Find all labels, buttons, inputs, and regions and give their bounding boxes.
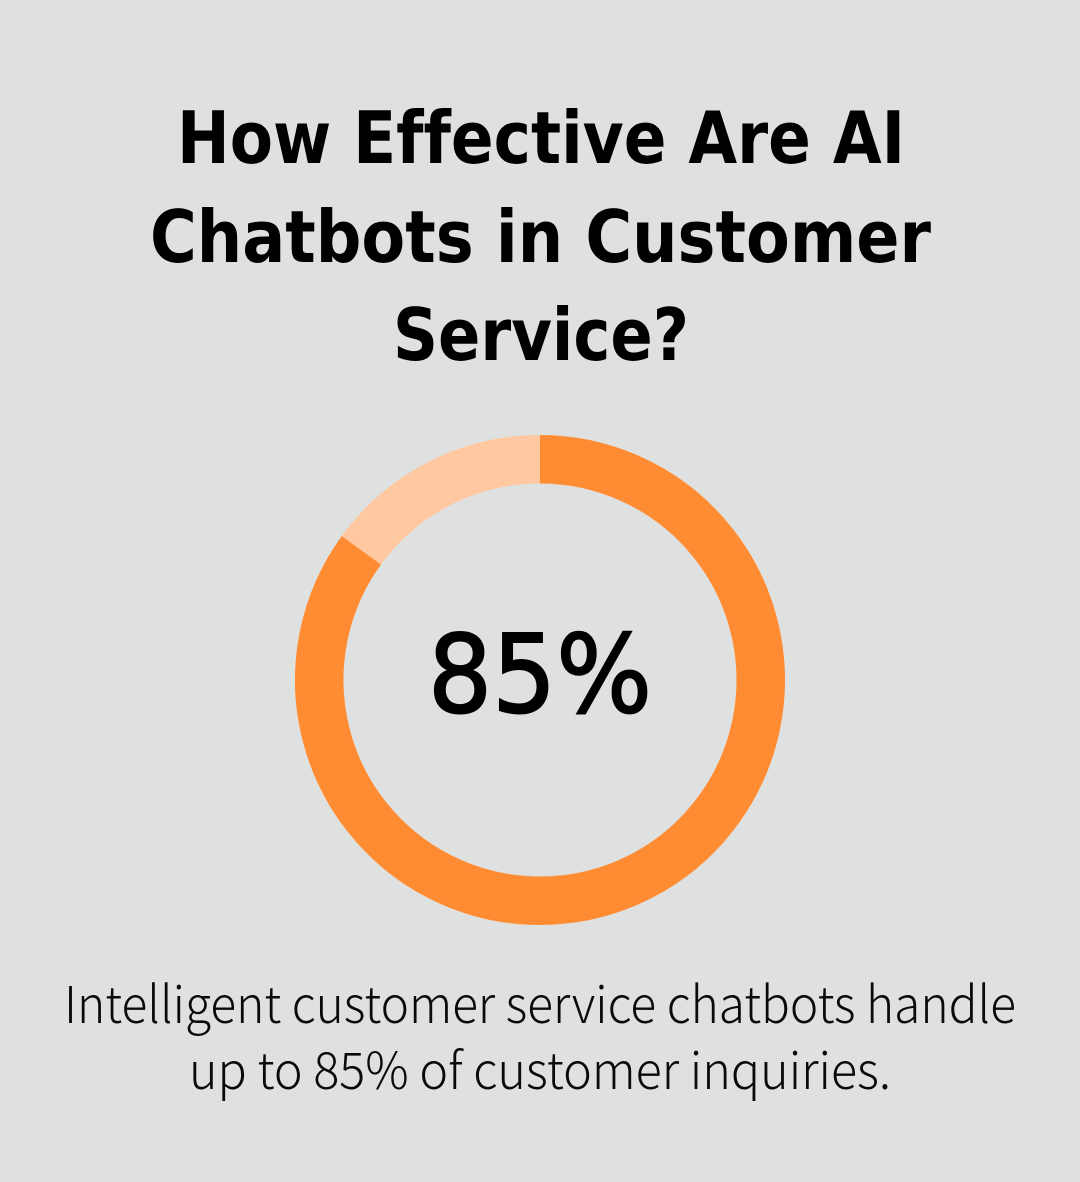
center value: 85% (428, 613, 652, 738)
description: up to 85% of customer inquiries. (189, 1030, 891, 1104)
title: Service? (393, 293, 689, 377)
remaining arc: 15% (361, 459, 540, 550)
title: How Effective Are AI (177, 96, 905, 180)
description (64, 964, 1016, 1104)
title (150, 96, 931, 377)
title: Chatbots in Customer (150, 195, 931, 279)
donut chart: 85% (319, 459, 761, 901)
filled arc: 85% (319, 459, 761, 901)
description: Intelligent customer service chatbots handle (64, 964, 1016, 1038)
